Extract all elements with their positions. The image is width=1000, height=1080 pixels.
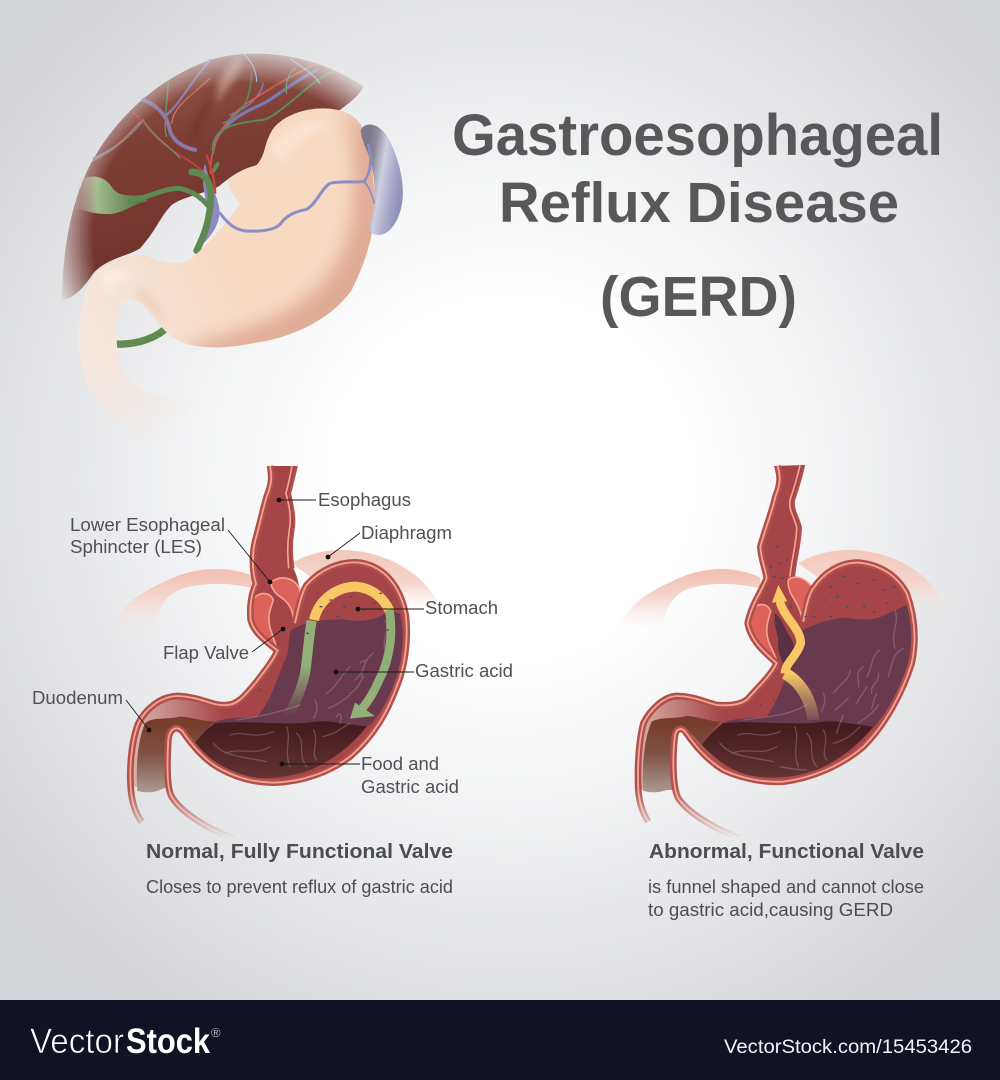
reflux arrow <box>772 585 813 720</box>
hepatic vessels <box>93 53 333 193</box>
funnel folds <box>747 577 812 663</box>
stomach wall fill <box>130 466 407 788</box>
green ducts <box>130 164 218 251</box>
spleen <box>361 125 403 235</box>
sphincter folds <box>249 578 300 650</box>
caption: abnormal valve: to gastric acid,causing GERD <box>648 900 893 920</box>
food layer <box>193 721 367 778</box>
diagram: normal valve <box>113 466 438 838</box>
wiggles in acid and food <box>213 620 387 767</box>
footer logo: Vector <box>30 1022 124 1061</box>
yellow reflux-free arrow <box>288 587 391 715</box>
liver <box>62 53 364 301</box>
reflux channel <box>775 613 794 670</box>
caption: normal valve: Closes to prevent reflux of gastric acid <box>146 877 453 897</box>
green arrow head <box>350 703 375 719</box>
title: Reflux Disease <box>499 171 899 235</box>
stomach wall fill <box>638 465 914 790</box>
caption: normal valve <box>146 840 453 897</box>
title: Gastroesophageal <box>452 103 943 168</box>
label: food and gastric acid: Gastric acid <box>361 777 459 797</box>
footer bar <box>0 1000 1000 1080</box>
stomach and duodenum <box>79 108 374 406</box>
label: duodenum: Duodenum <box>32 688 123 708</box>
duodenal contents <box>137 717 214 792</box>
wall lines <box>638 465 914 838</box>
diaphragm <box>113 550 438 628</box>
label: stomach: Stomach <box>425 598 498 618</box>
footer logo: Stock <box>126 1022 210 1061</box>
duodenal contents <box>643 716 721 792</box>
title <box>452 103 943 329</box>
wall lines <box>130 466 407 838</box>
label: gastric acid: Gastric acid <box>415 661 513 681</box>
label: food and gastric acid: Food and <box>361 754 439 774</box>
speckles <box>260 593 391 713</box>
food layer <box>702 721 873 778</box>
title: (GERD) <box>600 265 797 329</box>
caption: abnormal valve <box>648 840 924 920</box>
footer image id: VectorStock.com/15453426 <box>724 1037 972 1058</box>
wiggles in acid and food <box>720 610 903 770</box>
leader dots <box>147 498 360 766</box>
leader lines <box>126 500 424 764</box>
diagram: abnormal valve <box>620 465 945 838</box>
illustration: liver, stomach and spleen <box>62 53 403 406</box>
acid layer <box>210 611 403 727</box>
footer logo: ® <box>211 1025 221 1040</box>
label: LES <box>70 515 225 557</box>
bile duct blob <box>75 177 147 214</box>
labels with leader lines: normal diagram <box>32 490 513 797</box>
speckles <box>760 547 895 705</box>
label: food and gastric acid <box>361 754 459 797</box>
footer logo <box>30 1022 221 1061</box>
portal vein <box>198 163 219 248</box>
splenic artery <box>220 145 374 231</box>
label: diaphragm: Diaphragm <box>361 523 452 543</box>
label: flap valve: Flap Valve <box>163 643 249 663</box>
label: esophagus: Esophagus <box>318 490 411 510</box>
label: LES: Sphincter (LES) <box>70 537 202 557</box>
lower gastric vessel <box>112 329 165 344</box>
caption: abnormal valve: is funnel shaped and cannot close <box>648 877 924 897</box>
caption: normal valve: Normal, Fully Functional Valve <box>146 840 453 863</box>
caption: abnormal valve: Abnormal, Functional Valve <box>649 840 924 863</box>
label: LES: Lower Esophageal <box>70 515 225 535</box>
acid layer <box>720 605 912 727</box>
diaphragm <box>620 550 945 628</box>
